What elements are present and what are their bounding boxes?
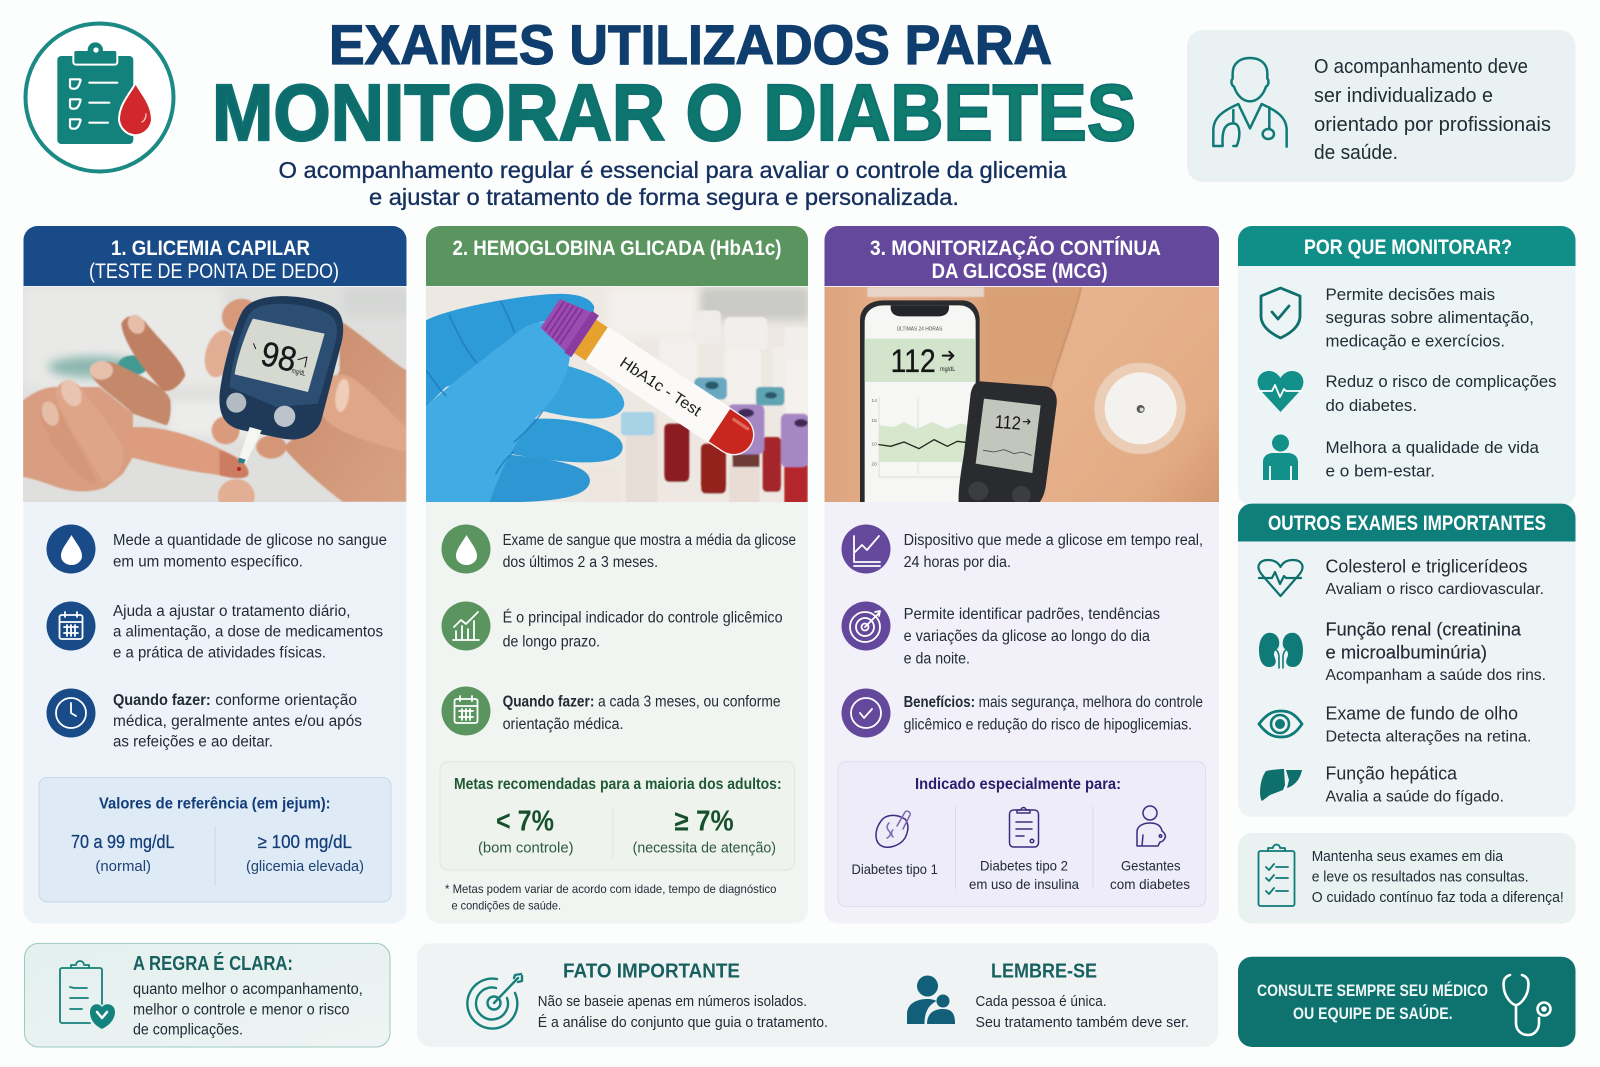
item: eye exam <box>1259 704 1532 745</box>
footnote: * Metas podem variar de acordo com idade, tempo de diagnóstico <box>445 882 777 896</box>
item: when to test: orientação médica. <box>503 716 624 733</box>
smartphone: 14 <box>871 398 877 404</box>
panel: hemoglobina glicada <box>426 226 810 924</box>
heading: hemoglobina glicada <box>426 226 808 286</box>
card: keep exams up to date: Mantenha seus exames em dia <box>1312 849 1504 865</box>
item: safer decisions: medicação e exercícios. <box>1326 332 1505 351</box>
smartphone: 112 <box>891 343 936 379</box>
handheld reader <box>959 381 1057 507</box>
icon: stethoscope <box>1504 975 1550 1035</box>
item: quality of life: e o bem-estar. <box>1326 462 1435 481</box>
handheld reader: 112 <box>994 411 1022 434</box>
item: quality of life: Melhora a qualidade de vida <box>1326 438 1540 457</box>
item: safer decisions: Permite decisões mais <box>1326 285 1495 304</box>
item: quality of life <box>1263 434 1540 481</box>
lembre-se: Seu tratamento também deve ser. <box>976 1014 1189 1031</box>
lembre-se <box>907 961 1189 1031</box>
item: when to test <box>442 686 781 736</box>
item: benefits: glicêmico e redução do risco de hipoglicemias. <box>904 717 1192 734</box>
callout: individualized follow-up: O acompanhamento deve <box>1314 56 1528 78</box>
reference values box: Valores de referência (em jejum): <box>99 795 331 812</box>
heading: por que monitorar <box>1238 226 1576 266</box>
item: reduce complications <box>1258 371 1556 415</box>
item: treatment adjustment <box>46 602 383 662</box>
callout: a regra é clara: de complicações. <box>133 1022 243 1039</box>
callout: a regra é clara: A REGRA É CLARA: <box>133 952 293 975</box>
glucose meter: mg/dL <box>291 366 307 378</box>
goals box: (bom controle) <box>478 840 574 856</box>
test tube <box>540 299 754 456</box>
lembre-se: Cada pessoa é única. <box>976 993 1107 1010</box>
heading: monitorização contínua: DA GLICOSE (MCG) <box>932 260 1108 283</box>
item: benefits <box>842 688 1203 738</box>
photo: finger-prick glucose meter <box>23 287 410 514</box>
heading: outros exames: OUTROS EXAMES IMPORTANTES <box>1268 512 1546 535</box>
indications box: Diabetes tipo 1 <box>852 861 938 877</box>
item: liver function: Função hepática <box>1326 764 1458 784</box>
item: main indicator: É o principal indicador do controle glicêmico <box>503 610 783 626</box>
smartphone: mg/dL <box>940 366 956 373</box>
item: real time device: 24 horas por dia. <box>904 554 1011 571</box>
footnote <box>445 882 777 913</box>
goals box: < 7% <box>496 806 554 838</box>
item: cholesterol <box>1259 556 1544 598</box>
item: real time device: Dispositivo que mede a glicose em tempo real, <box>904 532 1203 549</box>
panel: monitorização contínua <box>824 226 1220 924</box>
subtitle: e ajustar o tratamento de forma segura e personalizada. <box>369 184 959 210</box>
call to action: consult your doctor: CONSULTE SEMPRE SEU MÉDICO <box>1257 981 1488 1000</box>
item: patterns: Permite identificar padrões, tendências <box>904 606 1160 623</box>
item: patterns: e variações da glicose ao longo do dia <box>904 628 1150 645</box>
icon: doctor <box>1213 58 1287 147</box>
left hand <box>23 312 249 491</box>
indications box <box>838 762 1206 907</box>
title <box>212 13 1136 157</box>
indications box: com diabetes <box>1110 876 1190 892</box>
item: treatment adjustment: Ajuda a ajustar o tratamento diário, <box>113 603 350 620</box>
smartphone: 20 <box>871 461 877 467</box>
subtitle <box>278 157 1067 210</box>
item: when to test: as refeições e ao deitar. <box>113 734 273 750</box>
smartphone: 15 <box>871 418 877 424</box>
item: blood test average: dos últimos 2 a 3 meses. <box>503 554 658 571</box>
photo: continuous glucose sensor on arm <box>824 287 1220 507</box>
smartphone <box>860 300 980 507</box>
heading: glicemia capilar <box>24 226 406 286</box>
reference values box: (normal) <box>95 858 151 875</box>
icon: people <box>907 976 955 1024</box>
callout: individualized follow-up <box>1187 30 1576 182</box>
item: when to test <box>46 688 362 750</box>
item: reduce complications: do diabetes. <box>1326 396 1417 415</box>
fato importante: FATO IMPORTANTE <box>563 961 740 983</box>
item: kidney function: Função renal (creatinina <box>1326 620 1522 640</box>
indications box: Gestantes <box>1121 858 1181 874</box>
panel: glicemia capilar <box>23 226 410 924</box>
item: cholesterol: Colesterol e triglicerídeos <box>1326 556 1528 576</box>
blue glove <box>426 294 624 503</box>
icon: target <box>467 974 522 1029</box>
glucose meter <box>219 296 343 464</box>
right hand <box>200 292 406 502</box>
indications box: Diabetes tipo 2 <box>980 858 1068 874</box>
item: blood test average: Exame de sangue que mostra a média da glicose <box>503 532 796 549</box>
heading: outros exames <box>1238 504 1576 542</box>
icon: clipboard with heart <box>60 961 115 1029</box>
item: benefits: mais segurança, melhora do controle <box>979 694 1203 711</box>
callout: a regra é clara <box>24 943 390 1047</box>
item: kidney function: Acompanham a saúde dos rins. <box>1326 667 1546 684</box>
item: kidney function: e microalbuminúria) <box>1326 643 1487 663</box>
item: reduce complications: Reduz o risco de complicações <box>1326 372 1556 391</box>
card: important fact and reminder <box>417 943 1218 1047</box>
reference values box: ≥ 100 mg/dL <box>258 831 352 852</box>
item: safer decisions <box>1261 285 1534 351</box>
item: what it measures <box>46 524 387 574</box>
item: when to test: Quando fazer: <box>113 692 211 709</box>
item: blood test average <box>442 524 796 574</box>
icon: pregnant women <box>1137 806 1165 846</box>
icon: diabetes type 2 <box>1010 808 1038 847</box>
icon: checklist clipboard <box>1258 844 1294 906</box>
item: patterns: e da noite. <box>904 650 970 667</box>
item: what it measures: Mede a quantidade de glicose no sangue <box>113 532 387 549</box>
heading: monitorização contínua: 3. MONITORIZAÇÃO CONTÍNUA <box>870 237 1161 260</box>
item: real time device <box>842 524 1203 574</box>
item: when to test: médica, geralmente antes e/ou após <box>113 713 362 730</box>
smartphone: ÚLTIMAS 24 HORAS <box>897 325 943 332</box>
heading: glicemia capilar: (TESTE DE PONTA DE DEDO) <box>89 260 339 283</box>
item: liver function <box>1260 764 1504 806</box>
fato importante: É a análise do conjunto que guia o tratamento. <box>538 1014 828 1031</box>
item: when to test: conforme orientação <box>215 692 357 709</box>
item: when to test: a cada 3 meses, ou conforme <box>598 693 781 710</box>
subtitle: O acompanhamento regular é essencial para avaliar o controle da glicemia <box>278 157 1067 183</box>
icon: diabetes type 1 <box>876 811 910 847</box>
item: when to test: Quando fazer: <box>503 693 594 710</box>
logo: clipboard and blood drop <box>26 24 174 172</box>
callout: individualized follow-up: ser individualizado e <box>1314 85 1493 107</box>
item: main indicator <box>442 602 783 650</box>
panel: por que monitorar <box>1238 226 1576 506</box>
fato importante <box>467 961 828 1031</box>
smartphone: 10 <box>871 441 877 447</box>
test tube: HbA1c - Test <box>617 354 705 420</box>
item: main indicator: de longo prazo. <box>503 633 600 650</box>
callout: a regra é clara: quanto melhor o acompanhamento, <box>133 981 363 998</box>
item: treatment adjustment: e a prática de atividades físicas. <box>113 644 326 662</box>
item: treatment adjustment: a alimentação, a dose de medicamentos <box>113 624 383 640</box>
heading: glicemia capilar: 1. GLICEMIA CAPILAR <box>111 237 310 260</box>
item: liver function: Avalia a saúde do fígado. <box>1326 789 1504 806</box>
indications box: em uso de insulina <box>969 876 1079 892</box>
card: keep exams up to date: O cuidado contínuo faz toda a diferença! <box>1312 890 1564 906</box>
reference values box <box>39 778 391 902</box>
panel: outros exames importantes <box>1238 504 1576 817</box>
lembre-se: LEMBRE-SE <box>991 961 1097 983</box>
item: patterns <box>842 602 1160 667</box>
glucose meter: 98 <box>257 335 300 380</box>
heading: hemoglobina glicada: 2. HEMOGLOBINA GLICADA (HbA1c) <box>452 237 782 260</box>
item: safer decisions: seguras sobre alimentação, <box>1326 308 1534 327</box>
item: cholesterol: Avaliam o risco cardiovascular. <box>1326 581 1544 598</box>
reference values box: 70 a 99 mg/dL <box>71 831 174 852</box>
item: eye exam: Exame de fundo de olho <box>1326 704 1518 724</box>
glucose sensor <box>1094 362 1186 454</box>
photo: gloved hand with HbA1c test tube <box>426 287 810 504</box>
footnote: e condições de saúde. <box>452 899 561 913</box>
goals box: Metas recomendadas para a maioria dos adultos: <box>454 776 782 793</box>
callout: individualized follow-up: orientado por profissionais <box>1314 114 1551 136</box>
card: keep exams up to date: e leve os resultados nas consultas. <box>1312 870 1529 886</box>
call to action: consult your doctor <box>1238 957 1576 1047</box>
item: eye exam: Detecta alterações na retina. <box>1326 728 1532 745</box>
item: kidney function <box>1259 620 1546 684</box>
title: MONITORAR O DIABETES <box>212 68 1136 157</box>
fato importante: Não se baseie apenas em números isolados. <box>538 993 807 1010</box>
call to action: consult your doctor: OU EQUIPE DE SAÚDE. <box>1293 1004 1453 1023</box>
item: benefits: Benefícios: <box>904 694 975 711</box>
heading: por que monitorar: POR QUE MONITORAR? <box>1304 236 1512 259</box>
reference values box: (glicemia elevada) <box>246 858 364 875</box>
title: EXAMES UTILIZADOS PARA <box>329 13 1052 76</box>
goals box <box>440 762 794 870</box>
goals box: ≥ 7% <box>674 806 734 838</box>
goals box: (necessita de atenção) <box>633 840 776 856</box>
item: what it measures: em um momento específico. <box>113 554 303 570</box>
indications box: Indicado especialmente para: <box>915 776 1121 793</box>
callout: a regra é clara: melhor o controle e menor o risco <box>133 1002 350 1018</box>
card: keep exams up to date <box>1238 833 1576 924</box>
callout: individualized follow-up: de saúde. <box>1314 142 1398 164</box>
heading: monitorização contínua <box>824 226 1219 286</box>
